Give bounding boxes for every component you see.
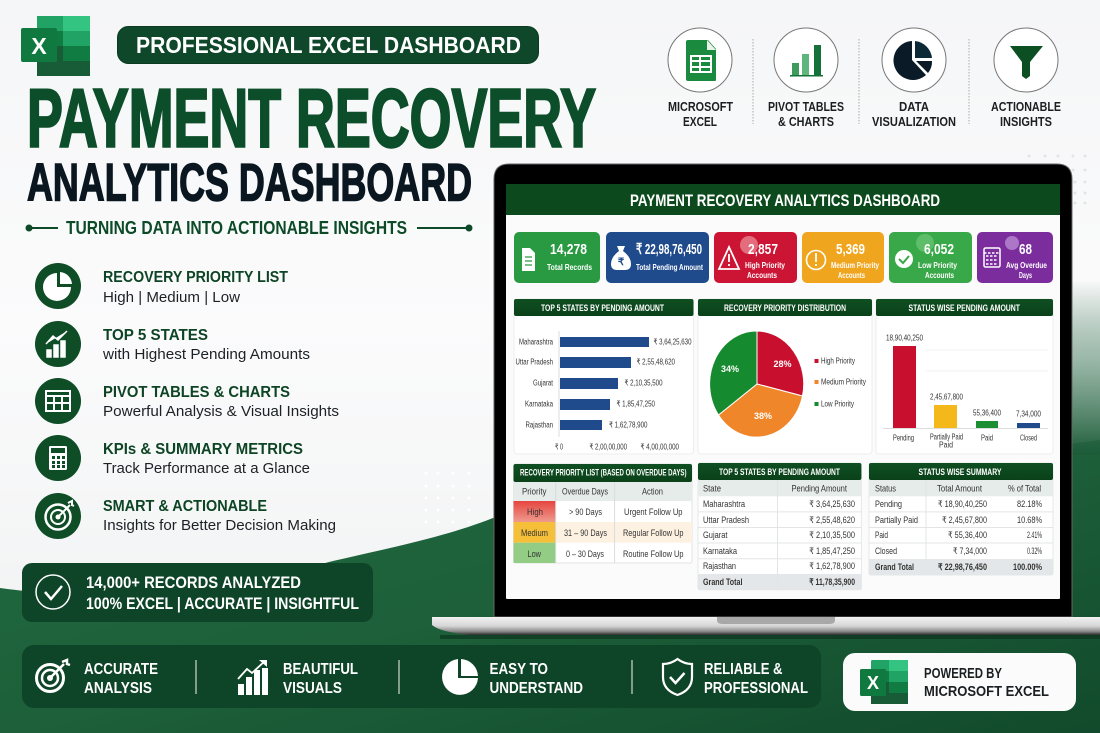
kpi: high priority: High Priority	[745, 260, 785, 270]
labels: 55,36,400	[973, 408, 1001, 418]
item: recovery priority list: RECOVERY PRIORITY LIST	[103, 269, 288, 286]
benefit: reliable and professional	[663, 659, 808, 697]
table: recovery priority list: Action	[642, 486, 663, 496]
benefit: easy to understand: EASY TO	[490, 661, 548, 678]
benefit: easy to understand	[442, 659, 583, 697]
table: status wise summary: Paid	[875, 530, 888, 540]
bar labels: ₹ 0	[555, 442, 563, 452]
top feature: pivot tables and charts: PIVOT TABLES	[768, 99, 844, 114]
kpi: average overdue days: 68	[1019, 241, 1032, 258]
item: top 5 states: TOP 5 STATES	[103, 327, 208, 344]
title: analytics dashboard: ANALYTICS DASHBOARD	[27, 154, 472, 212]
table: recovery priority list: 31 – 90 Days	[564, 528, 607, 538]
table: recovery priority list: Overdue Days	[562, 486, 608, 496]
table: top 5 states: TOP 5 STATES BY PENDING AMOUNT	[719, 467, 840, 478]
kpi: high priority: 2,857	[748, 241, 778, 258]
kpi: average overdue days: Avg Overdue	[1006, 260, 1047, 270]
table: status wise summary: ₹ 18,90,40,250	[938, 499, 987, 509]
bar labels: Rajasthan	[526, 420, 553, 430]
item: kpis and summary metrics	[35, 435, 310, 481]
table: top 5 states: State	[703, 484, 721, 494]
table: status wise summary: Pending	[875, 499, 902, 509]
table: top 5 states: Pending Amount	[792, 484, 847, 494]
table: top 5 states: Maharashtra	[703, 499, 745, 509]
kpi: total pending amount: ₹	[618, 257, 625, 268]
icon: excel logo small	[860, 660, 908, 704]
table: top 5 states: ₹ 2,10,35,500	[809, 530, 855, 540]
top feature: actionable insights: INSIGHTS	[1000, 114, 1052, 129]
table: status wise summary: 82.18%	[1017, 499, 1042, 509]
legend: High Priority	[821, 356, 855, 366]
bar labels: ₹ 2,00,00,000	[590, 442, 627, 452]
kpi: total pending amount: Total Pending Amount	[636, 262, 703, 272]
badge: professional excel dashboard	[118, 26, 538, 64]
benefit: beautiful visuals	[238, 660, 358, 697]
bottom benefits bar	[22, 645, 821, 708]
item: smart and actionable: Insights for Better Decision Making	[103, 517, 336, 534]
table: recovery priority list: RECOVERY PRIORITY LIST (BASED ON OVERDUE DAYS)	[520, 468, 686, 478]
legend: Low Priority	[821, 400, 854, 408]
table: recovery priority list: Priority	[522, 486, 547, 496]
table: status wise summary: ₹ 55,36,400	[948, 530, 987, 540]
labels: Pending	[893, 434, 914, 442]
kpi: high priority	[714, 232, 797, 283]
callout: records analyzed: 14,000+ RECORDS ANALYZED	[86, 573, 301, 592]
item: top 5 states: with Highest Pending Amounts	[102, 346, 310, 363]
kpi: medium priority	[802, 232, 884, 283]
labels: Partially Paid	[930, 432, 963, 442]
table: status wise summary	[869, 463, 1053, 575]
bars	[893, 346, 1040, 428]
top feature: microsoft excel: MICROSOFT	[668, 99, 733, 114]
panel: top 5 states bar chart: TOP 5 STATES BY PENDING AMOUNT	[541, 303, 664, 314]
table: top 5 states: ₹ 1,85,47,250	[809, 546, 855, 556]
panel: recovery priority pie chart: RECOVERY PRIORITY DISTRIBUTION	[724, 303, 846, 314]
labels: Paid	[981, 434, 993, 442]
legend: Medium Priority	[821, 378, 866, 386]
panel: status wise bar chart: STATUS WISE PENDING AMOUNT	[908, 303, 1020, 314]
panel: recovery priority pie chart	[698, 299, 872, 454]
table: recovery priority list: Urgent Follow Up	[624, 507, 682, 517]
table: status wise summary: Partially Paid	[875, 515, 918, 525]
icon: excel logo	[21, 16, 90, 76]
benefit: accurate analysis	[36, 660, 158, 697]
table: recovery priority list: Low	[528, 549, 541, 559]
benefit: accurate analysis: ACCURATE	[84, 661, 158, 678]
panel: top 5 states bar chart	[514, 299, 694, 454]
item: pivot tables and charts: Powerful Analysis & Visual Insights	[103, 403, 339, 420]
table: top 5 states: ₹ 1,62,78,900	[809, 561, 855, 571]
bar labels: ₹ 3,64,25,630	[654, 338, 692, 346]
top feature: pivot tables and charts: & CHARTS	[778, 114, 834, 129]
screen header	[506, 184, 1060, 215]
icon: excel logo: X	[31, 33, 47, 59]
kpi: high priority: Accounts	[747, 270, 777, 280]
badge: powered by microsoft excel: MICROSOFT EXCEL	[924, 683, 1049, 700]
benefit: easy to understand: UNDERSTAND	[490, 680, 583, 697]
labels	[886, 334, 1041, 450]
table: status wise summary: % of Total	[1008, 484, 1041, 494]
benefit: reliable and professional: RELIABLE &	[704, 661, 783, 678]
table: status wise summary: ₹ 2,45,67,800	[942, 515, 987, 525]
icon: excel logo small: X	[867, 673, 879, 693]
bar labels: ₹ 2,55,48,620	[636, 358, 675, 366]
benefit: beautiful visuals: BEAUTIFUL	[283, 661, 358, 678]
kpi: low priority: 6,052	[924, 241, 954, 258]
table: top 5 states: Uttar Pradesh	[703, 515, 749, 525]
kpi: medium priority: Medium Priority	[831, 260, 879, 270]
bar labels: ₹ 1,62,78,900	[609, 420, 648, 430]
bar labels: ₹ 2,10,35,500	[624, 378, 663, 388]
table: status wise summary: ₹ 22,98,76,450	[938, 562, 987, 572]
table: status wise summary: Status	[875, 484, 896, 494]
top feature: microsoft excel	[668, 28, 733, 129]
labels: 7,34,000	[1016, 410, 1041, 418]
benefit: reliable and professional: PROFESSIONAL	[704, 680, 808, 697]
item: smart and actionable: SMART & ACTIONABLE	[103, 498, 267, 515]
table: recovery priority list: > 90 Days	[569, 507, 602, 517]
benefit: beautiful visuals: VISUALS	[283, 680, 342, 697]
labels: Paid	[939, 440, 953, 450]
top feature: data visualization: DATA	[899, 99, 930, 114]
top feature: microsoft excel: EXCEL	[683, 114, 717, 129]
item: smart and actionable	[35, 493, 336, 539]
table: status wise summary: STATUS WISE SUMMARY	[918, 467, 1002, 478]
table: top 5 states: Rajasthan	[703, 561, 736, 571]
pie	[710, 331, 804, 437]
table: status wise summary: Grand Total	[875, 562, 914, 572]
table: recovery priority list: Regular Follow Up	[623, 528, 684, 538]
panel: recovery priority pie chart: 28%	[773, 359, 792, 369]
table: top 5 states: ₹ 2,55,48,620	[809, 515, 855, 525]
item: kpis and summary metrics: Track Performance at a Glance	[103, 460, 310, 477]
panel: recovery priority pie chart: 34%	[721, 364, 739, 374]
table: top 5 states: ₹ 11,78,35,900	[809, 577, 855, 587]
badge: professional excel dashboard: PROFESSIONAL EXCEL DASHBOARD	[136, 32, 521, 58]
callout: records analyzed	[22, 563, 373, 622]
labels: Closed	[1020, 434, 1037, 442]
table: status wise summary: 0.32%	[1027, 546, 1042, 556]
kpi: medium priority: Accounts	[838, 270, 865, 280]
item: kpis and summary metrics: KPIs & SUMMARY METRICS	[103, 441, 303, 458]
screen header: PAYMENT RECOVERY ANALYTICS DASHBOARD	[630, 191, 940, 210]
table: recovery priority list	[514, 464, 692, 563]
kpi: low priority	[889, 232, 972, 283]
table: status wise summary: ₹ 7,34,000	[953, 546, 987, 556]
table: status wise summary: 10.68%	[1017, 515, 1042, 525]
item: recovery priority list: High | Medium | Low	[103, 289, 240, 306]
bar labels	[516, 338, 692, 452]
table: status wise summary: 2.41%	[1027, 530, 1042, 540]
kpi: average overdue days: Days	[1019, 270, 1032, 280]
kpi: low priority: Low Priority	[918, 260, 957, 270]
kpi: total records: 14,278	[550, 241, 587, 258]
kpi: low priority: Accounts	[925, 270, 954, 280]
screen	[506, 184, 1060, 599]
top feature: data visualization: VISUALIZATION	[872, 114, 956, 129]
table: status wise summary: Closed	[875, 546, 897, 556]
table: top 5 states: Grand Total	[703, 577, 742, 587]
table: status wise summary: Total Amount	[937, 484, 982, 494]
panel: status wise bar chart	[876, 299, 1053, 454]
kpi: total pending amount	[606, 232, 709, 283]
bar labels: ₹ 1,85,47,250	[616, 400, 655, 408]
bar labels: Uttar Pradesh	[516, 358, 553, 366]
item: recovery priority list	[35, 263, 288, 309]
bar labels: Maharashtra	[519, 338, 553, 346]
item: pivot tables and charts	[35, 378, 339, 424]
kpi: total records	[514, 232, 600, 283]
bar labels: Karnataka	[525, 400, 553, 408]
bar labels: Gujarat	[533, 378, 554, 388]
benefit: accurate analysis: ANALYSIS	[84, 680, 152, 697]
kpi: total records: Total Records	[547, 262, 592, 272]
panel: recovery priority pie chart: 38%	[754, 411, 772, 421]
badge: powered by microsoft excel: POWERED BY	[924, 665, 1002, 682]
labels: 18,90,40,250	[886, 334, 923, 342]
top feature: actionable insights: ACTIONABLE	[991, 99, 1061, 114]
table: recovery priority list: Medium	[521, 528, 548, 538]
laptop base	[432, 617, 1100, 639]
table: recovery priority list: 0 – 30 Days	[566, 549, 604, 559]
table: top 5 states: Gujarat	[703, 530, 728, 540]
table: status wise summary: 100.00%	[1013, 562, 1042, 572]
labels: 2,45,67,800	[930, 392, 963, 402]
title: payment recovery: PAYMENT RECOVERY	[27, 72, 596, 164]
table: top 5 states: ₹ 3,64,25,630	[809, 499, 855, 509]
laptop	[432, 164, 1100, 639]
table: recovery priority list: Routine Follow Up	[623, 549, 684, 559]
badge: powered by microsoft excel	[843, 653, 1076, 711]
feature list	[35, 263, 339, 539]
bar labels: ₹ 4,00,00,000	[640, 442, 679, 452]
kpi: medium priority: 5,369	[836, 241, 865, 258]
item: top 5 states	[35, 321, 310, 367]
top feature: data visualization	[872, 28, 956, 129]
table: top 5 states	[698, 463, 861, 590]
table: recovery priority list: High	[527, 507, 543, 517]
bars	[560, 337, 649, 430]
legend	[814, 356, 866, 408]
kpi: average overdue days	[977, 232, 1053, 283]
top feature: pivot tables and charts	[768, 28, 844, 129]
callout: records analyzed: 100% EXCEL | ACCURATE | INSIGHTFUL	[86, 594, 359, 613]
top feature: actionable insights	[991, 28, 1061, 129]
item: pivot tables and charts: PIVOT TABLES & CHARTS	[103, 384, 290, 401]
kpi: total pending amount: ₹ 22,98,76,450	[636, 241, 702, 258]
table: top 5 states: Karnataka	[703, 546, 737, 556]
tagline: TURNING DATA INTO ACTIONABLE INSIGHTS	[66, 218, 407, 238]
